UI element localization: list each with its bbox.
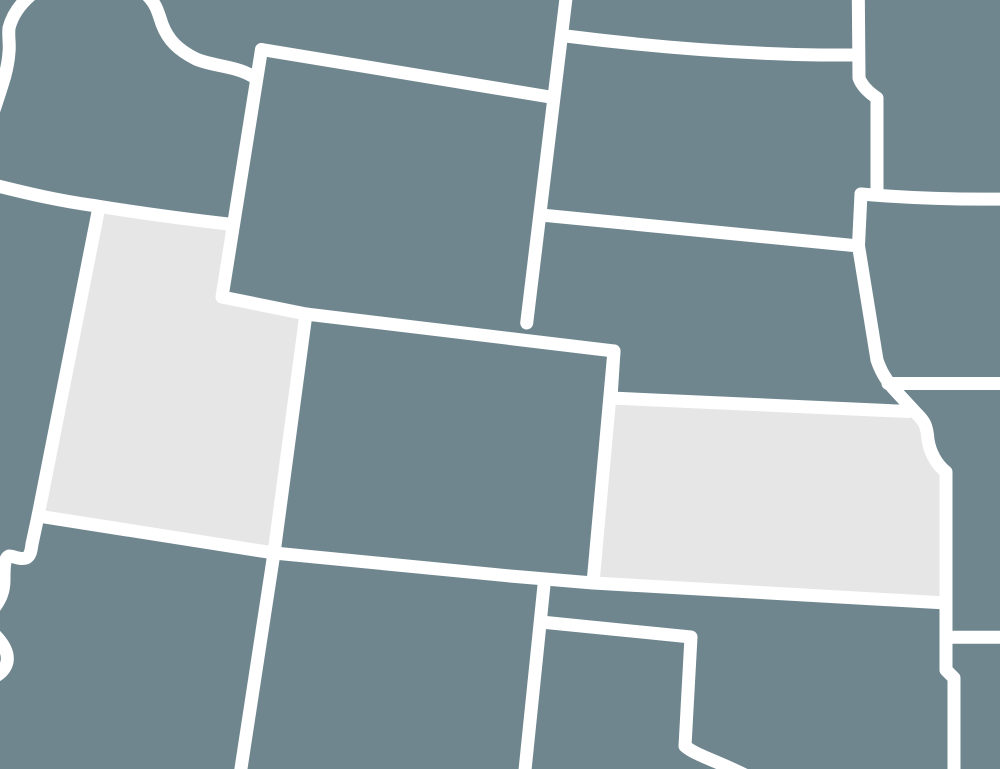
highlighted state: Kansas: [593, 398, 946, 603]
highlighted state: Utah: [38, 208, 306, 553]
